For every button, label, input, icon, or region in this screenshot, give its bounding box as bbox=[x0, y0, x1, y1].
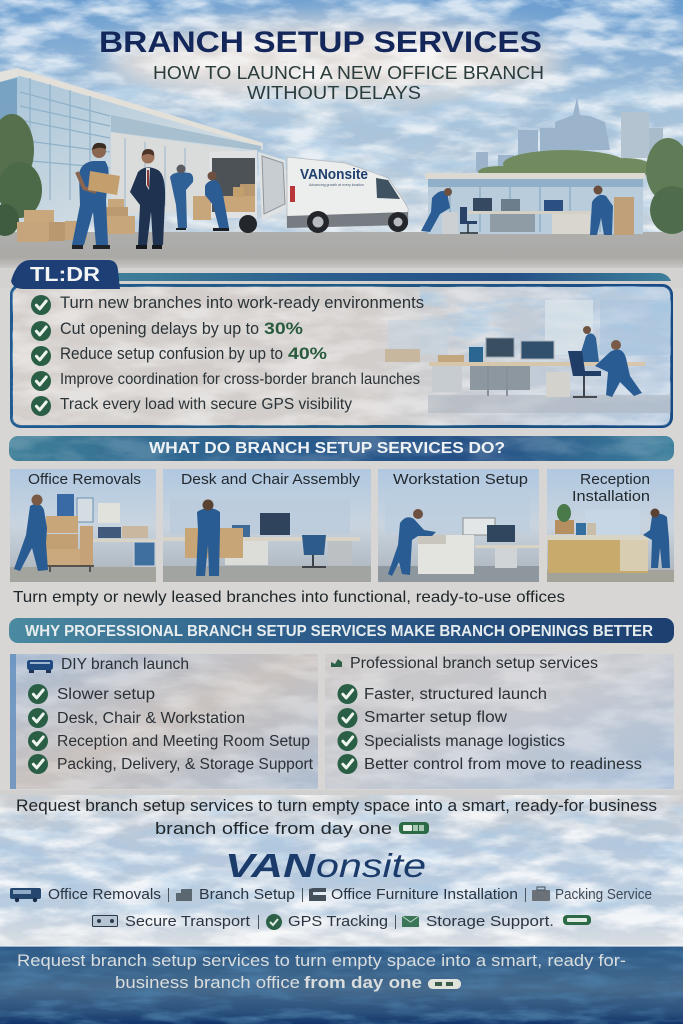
caption: Turn empty or newly leased branches into functional, ready-to-use offices bbox=[13, 589, 565, 606]
icon: footer pill bbox=[428, 979, 461, 989]
service label: Packing Service bbox=[555, 886, 652, 903]
icon: building bbox=[176, 889, 192, 901]
list item: confusion 40% bbox=[31, 345, 327, 366]
TL:DR top stripe bbox=[118, 273, 671, 281]
panel: DIY branch launch bbox=[10, 654, 318, 789]
trees: left bbox=[0, 114, 42, 236]
professional item: Faster, structured launch bbox=[364, 686, 547, 703]
TL:DR tab label: TL:DR bbox=[30, 264, 101, 286]
professional heading: Professional branch setup services bbox=[350, 655, 598, 672]
call to action: Request branch setup services to turn empty space into a smart, ready-for business bbox=[16, 797, 657, 815]
logo: VANonsite: onsite bbox=[316, 847, 426, 884]
title: BRANCH SETUP SERVICES bbox=[99, 26, 542, 59]
professional item: Better control from move to readiness bbox=[364, 756, 642, 773]
list item: delays 30% bbox=[31, 320, 303, 341]
subtitle: HOW TO LAUNCH A NEW OFFICE BRANCH bbox=[153, 62, 544, 83]
card: desk and chair assembly bbox=[163, 469, 371, 582]
separator bbox=[302, 888, 303, 902]
van bbox=[209, 150, 408, 233]
list item: work-ready: Turn new branches into work-ready environments bbox=[60, 294, 424, 312]
professional icon bbox=[331, 659, 342, 667]
list item: delays 30%: 30% bbox=[264, 320, 303, 338]
service label: Office Furniture Installation bbox=[331, 886, 518, 903]
icon: packing case bbox=[532, 887, 550, 901]
footer call to action: business branch office bbox=[115, 974, 300, 992]
illustration: office desk with workers bbox=[385, 326, 645, 397]
list item: delays 30%: Cut opening delays by up to bbox=[60, 320, 259, 338]
logo: VANonsite: VAN bbox=[225, 847, 317, 884]
van logo text: VANonsite bbox=[300, 166, 368, 183]
DIY item: Desk, Chair & Workstation bbox=[57, 710, 245, 727]
subtitle: WITHOUT DELAYS bbox=[247, 82, 421, 103]
professional item: Smarter setup flow bbox=[364, 709, 508, 726]
banner: what do branch setup services do bbox=[9, 436, 674, 461]
footer call to action: Request branch setup services to turn empty space into a smart, ready for- bbox=[17, 952, 626, 970]
trees: behind office bbox=[478, 150, 653, 178]
building: glass office block bbox=[0, 68, 263, 225]
worker carrying box bbox=[72, 143, 120, 249]
card label: Reception bbox=[580, 471, 650, 488]
call to action bbox=[16, 797, 657, 838]
service label: Secure Transport bbox=[125, 913, 251, 930]
card: workstation setup bbox=[378, 469, 539, 582]
trees: right bbox=[646, 138, 683, 234]
city skyline bbox=[476, 97, 663, 173]
icon: green pill bbox=[399, 822, 429, 834]
professional item: Specialists manage logistics bbox=[364, 733, 565, 750]
man in suit bbox=[130, 149, 165, 249]
panel: TL:DR bbox=[11, 260, 672, 426]
logo: VANonsite bbox=[225, 847, 426, 884]
separator bbox=[525, 888, 526, 902]
card: office removals bbox=[10, 469, 156, 582]
TL:DR panel body bbox=[12, 286, 672, 426]
card label bbox=[572, 471, 650, 505]
panel cloud texture and office backdrop bbox=[12, 286, 671, 426]
box stack: left bbox=[17, 199, 135, 242]
banner text: WHAT DO BRANCH SETUP SERVICES DO? bbox=[149, 440, 505, 457]
call to action: branch office from day one bbox=[155, 820, 392, 838]
icon: furniture bbox=[309, 888, 326, 901]
TL:DR tab bbox=[11, 260, 120, 289]
icon: van bbox=[10, 888, 41, 902]
service label: Office Removals bbox=[48, 886, 161, 903]
banner text: WHY PROFESSIONAL BRANCH SETUP SERVICES MAKE BRANCH OPENINGS BETTER bbox=[25, 623, 653, 640]
card label: Desk and Chair Assembly bbox=[181, 471, 361, 488]
list item: GPS: Track every load with secure GPS visibility bbox=[60, 396, 352, 413]
icon: envelope bbox=[402, 916, 419, 927]
DIY item: Reception and Meeting Room Setup bbox=[57, 733, 310, 750]
DIY item: Slower setup bbox=[57, 686, 155, 703]
service label: Branch Setup bbox=[199, 886, 295, 903]
services row 2 bbox=[92, 913, 591, 930]
footer call to action bbox=[17, 952, 626, 992]
card label: Installation bbox=[572, 488, 650, 505]
icon: secure transport bbox=[92, 916, 118, 926]
separator bbox=[168, 888, 169, 902]
separator bbox=[395, 915, 396, 929]
DIY item bbox=[28, 684, 155, 704]
list item: coordination: Improve coordination for cross-border branch launches bbox=[60, 371, 420, 388]
icon: check bbox=[266, 914, 282, 930]
subtitle bbox=[153, 62, 544, 103]
service label: GPS Tracking bbox=[288, 913, 388, 930]
list item: confusion 40%: Reduce setup confusion by up to bbox=[60, 345, 283, 363]
icon: green pill bbox=[563, 915, 591, 925]
professional item bbox=[338, 684, 547, 704]
DIY item: Packing, Delivery, & Storage Support bbox=[57, 756, 314, 773]
card: reception installation bbox=[547, 469, 674, 582]
DIY icon bbox=[27, 660, 53, 673]
DIY heading: DIY branch launch bbox=[61, 656, 189, 673]
professional item bbox=[338, 708, 508, 728]
office pavilion with desk team bbox=[421, 173, 645, 235]
banner: why professional branch setup bbox=[9, 618, 674, 643]
panel: professional branch setup services bbox=[325, 654, 674, 789]
separator bbox=[258, 915, 259, 929]
footer call to action: from day one bbox=[304, 974, 422, 992]
card label: Office Removals bbox=[28, 471, 141, 488]
services row 1 bbox=[10, 886, 652, 903]
card label: Workstation Setup bbox=[393, 471, 528, 488]
list item: confusion 40%: 40% bbox=[288, 345, 327, 363]
service label: Storage Support. bbox=[426, 913, 554, 930]
loading workers and boxes bbox=[170, 164, 229, 231]
van tagline: Advancing growth at every location bbox=[309, 182, 364, 187]
